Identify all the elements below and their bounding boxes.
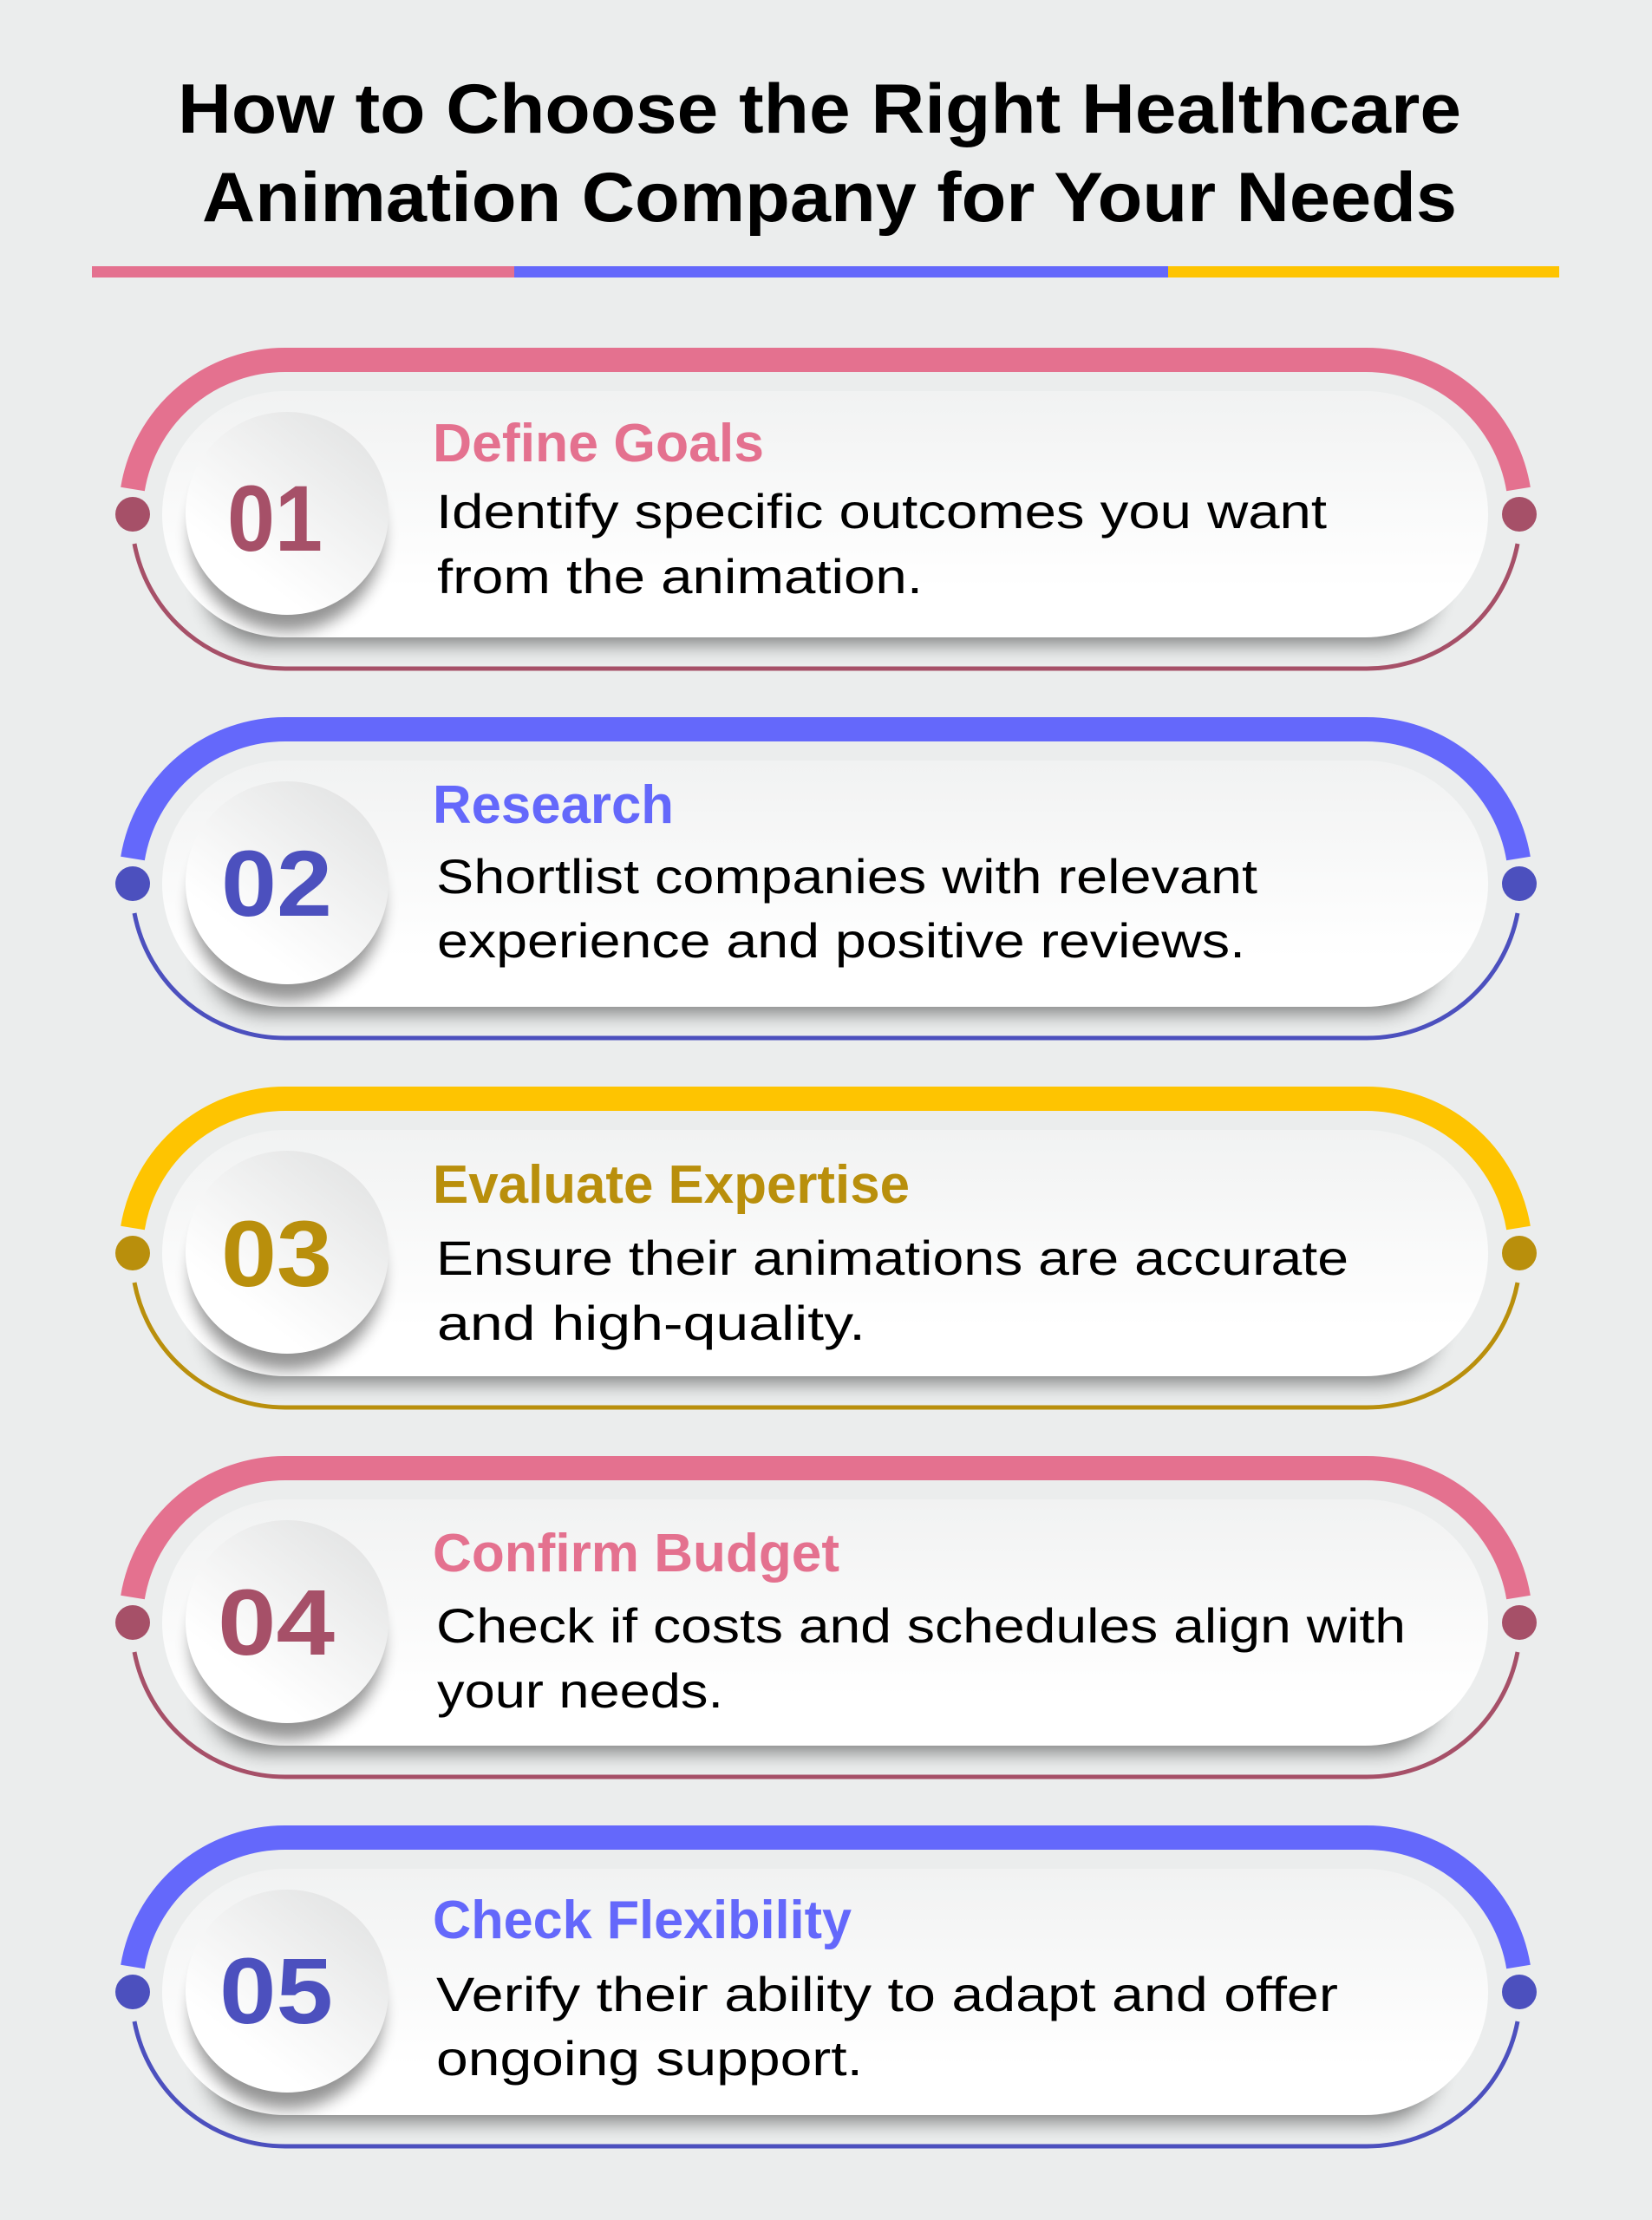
body text: Ensure their animations are accurate (436, 1231, 1348, 1285)
panel: step 02 (115, 729, 1537, 1038)
connector dots (115, 1975, 1537, 2009)
heading: Confirm Budget (433, 1524, 839, 1583)
bottom arc (134, 544, 1518, 669)
body text (436, 1231, 1348, 1350)
body text (436, 1598, 1406, 1718)
top arc (133, 1099, 1518, 1228)
connector dots (115, 1605, 1537, 1640)
card shadow (204, 890, 1440, 1014)
number: 02 (221, 831, 332, 936)
body text: Shortlist companies with relevant (436, 849, 1258, 904)
body text (436, 849, 1258, 968)
number disc (186, 1520, 389, 1723)
card (162, 1499, 1488, 1746)
top arc (133, 360, 1518, 489)
number: 05 (219, 1938, 333, 2043)
number disc shadow (182, 508, 392, 637)
body text: Verify their ability to adapt and offer (436, 1967, 1338, 2021)
body text: ongoing support. (436, 2031, 863, 2086)
top arc (133, 1468, 1518, 1597)
number disc shadow (182, 1986, 392, 2115)
body text: and high-quality. (437, 1296, 865, 1350)
title: Animation Company for Your Needs (202, 159, 1457, 237)
title: How to Choose the Right Healthcare (178, 70, 1461, 148)
card (162, 761, 1488, 1007)
body text: Check if costs and schedules align with (436, 1598, 1406, 1653)
heading: Research (433, 775, 674, 835)
card shadow (204, 1629, 1440, 1753)
bottom arc (134, 1283, 1518, 1407)
body text: experience and positive reviews. (437, 913, 1245, 968)
body text (436, 1967, 1338, 2086)
connector dots (115, 497, 1537, 532)
bottom arc (134, 2021, 1518, 2146)
connector dots (115, 866, 1537, 901)
number: 03 (221, 1201, 332, 1306)
number: 04 (218, 1570, 335, 1675)
panel: step 03 (115, 1099, 1537, 1407)
bottom arc (134, 913, 1518, 1038)
card (162, 391, 1488, 637)
panel: step 01 (115, 360, 1537, 669)
number disc shadow (182, 1247, 392, 1376)
card shadow (204, 520, 1440, 644)
number disc shadow (182, 878, 392, 1007)
connector dots (115, 1236, 1537, 1270)
body text: from the animation. (437, 549, 923, 604)
number: 01 (227, 466, 323, 571)
card shadow (204, 1998, 1440, 2122)
body text: Identify specific outcomes you want (436, 484, 1328, 539)
panel: step 05 (115, 1838, 1537, 2146)
tricolor divider (92, 266, 1559, 278)
number disc (186, 781, 389, 984)
heading: Define Goals (433, 414, 764, 473)
panel: step 04 (115, 1468, 1537, 1777)
body text: your needs. (437, 1663, 723, 1718)
top arc (133, 729, 1518, 859)
card (162, 1130, 1488, 1376)
number disc (186, 1890, 389, 2093)
body text (436, 484, 1328, 604)
card shadow (204, 1259, 1440, 1383)
heading: Check Flexibility (433, 1890, 852, 1950)
number disc shadow (182, 1616, 392, 1746)
number disc (186, 412, 389, 615)
card (162, 1869, 1488, 2115)
heading: Evaluate Expertise (433, 1155, 910, 1215)
top arc (133, 1838, 1518, 1967)
bottom arc (134, 1652, 1518, 1777)
number disc (186, 1151, 389, 1354)
title (178, 70, 1461, 237)
